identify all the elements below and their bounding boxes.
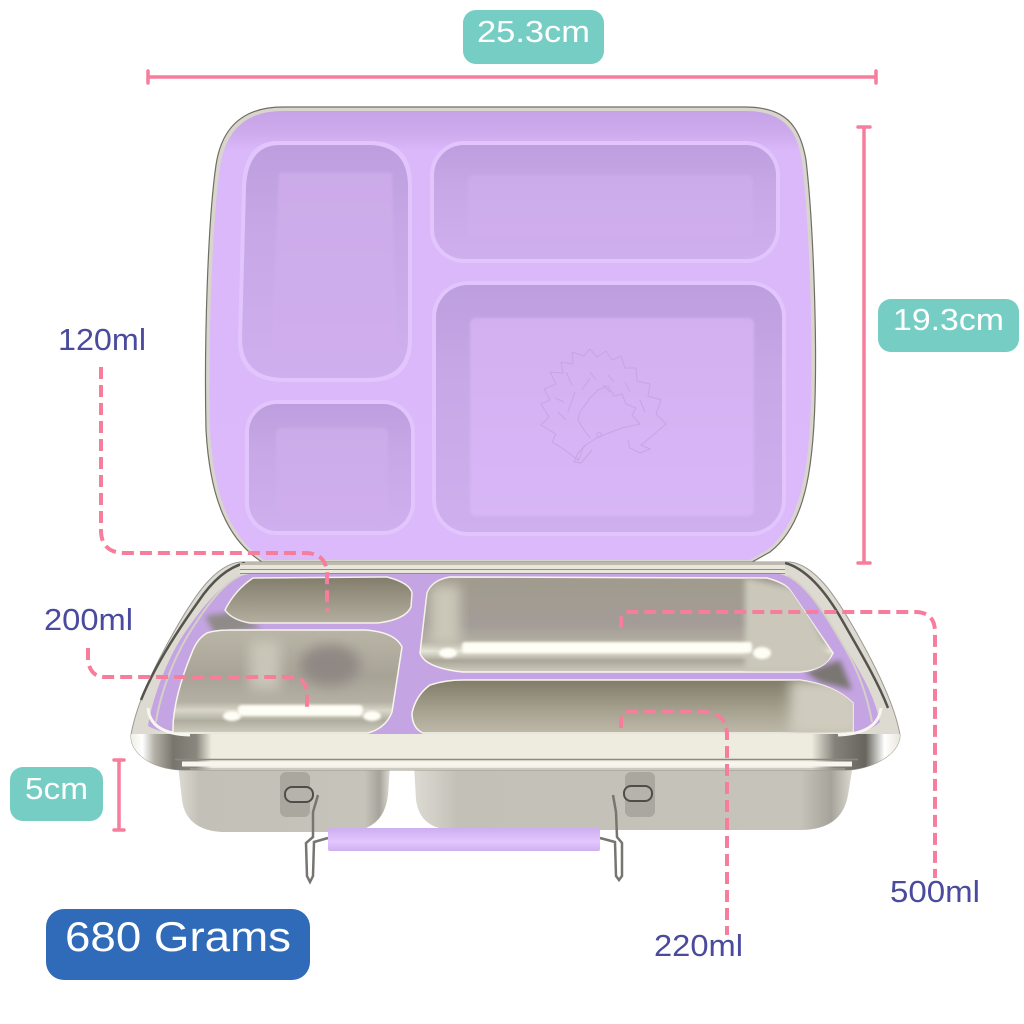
- rim top band: [240, 563, 785, 574]
- left clip: [280, 772, 328, 882]
- capacity label 500ml: 500ml: [890, 874, 980, 909]
- compartment 200ml: [173, 630, 402, 733]
- width dimension bar: [148, 71, 876, 83]
- lid steel edge: [205, 107, 816, 562]
- lunch box illustration: [131, 107, 900, 882]
- lid compartment large: [432, 281, 786, 536]
- grey reflections on liner: [205, 612, 852, 690]
- lid compartment bottom left: [245, 400, 415, 535]
- reflection patches: [430, 585, 460, 645]
- label: weight 680 Grams: 680 Grams: [65, 913, 291, 960]
- lid compartment top right: [430, 141, 780, 263]
- handle: [328, 828, 600, 851]
- steel rim: [131, 562, 900, 770]
- rim front lip lines: [175, 760, 858, 769]
- liner steel stripes: [156, 576, 872, 722]
- capacity label 220ml: 220ml: [654, 928, 743, 963]
- label: width 25.3cm: 25.3cm: [477, 14, 590, 49]
- body left section: [178, 765, 390, 832]
- depth dimension bar: [114, 760, 124, 830]
- reflection patches: [300, 645, 360, 685]
- purple liner: [148, 574, 880, 734]
- dashed leader 200ml: [88, 648, 307, 712]
- dashed leader 120ml: [101, 367, 327, 612]
- height dimension bar: [858, 127, 870, 563]
- dashed leader 220ml: [621, 712, 727, 935]
- label: depth 5cm: [10, 767, 103, 821]
- icon: embossed hedgehog: [541, 349, 666, 463]
- capacity label 200ml: 200ml: [44, 602, 133, 637]
- dashed leader 500ml: [621, 612, 935, 878]
- label: height 19.3cm: 19.3cm: [893, 302, 1004, 337]
- reflection patch: [790, 680, 860, 735]
- capacity label 120ml: 120ml: [58, 322, 146, 357]
- rim front strip: [131, 734, 900, 770]
- body right section: [414, 765, 853, 830]
- label: depth 5cm: 5cm: [25, 771, 88, 806]
- label: width 25.3cm: [463, 10, 604, 64]
- compartment 500ml: [420, 577, 835, 672]
- lid compartment top left: [238, 141, 412, 382]
- rim corner highlight: [148, 708, 881, 735]
- lid purple seal: [209, 111, 812, 560]
- base tray: [131, 562, 900, 832]
- rim top lines: [240, 564, 785, 574]
- right clip: [600, 772, 655, 880]
- lid: [205, 107, 816, 562]
- label: height 19.3cm: [878, 299, 1019, 352]
- rim side dark edges: [141, 563, 888, 708]
- compartment 120ml: [225, 577, 412, 623]
- compartment 220ml: [412, 680, 860, 735]
- label: weight 680 Grams: [46, 909, 310, 980]
